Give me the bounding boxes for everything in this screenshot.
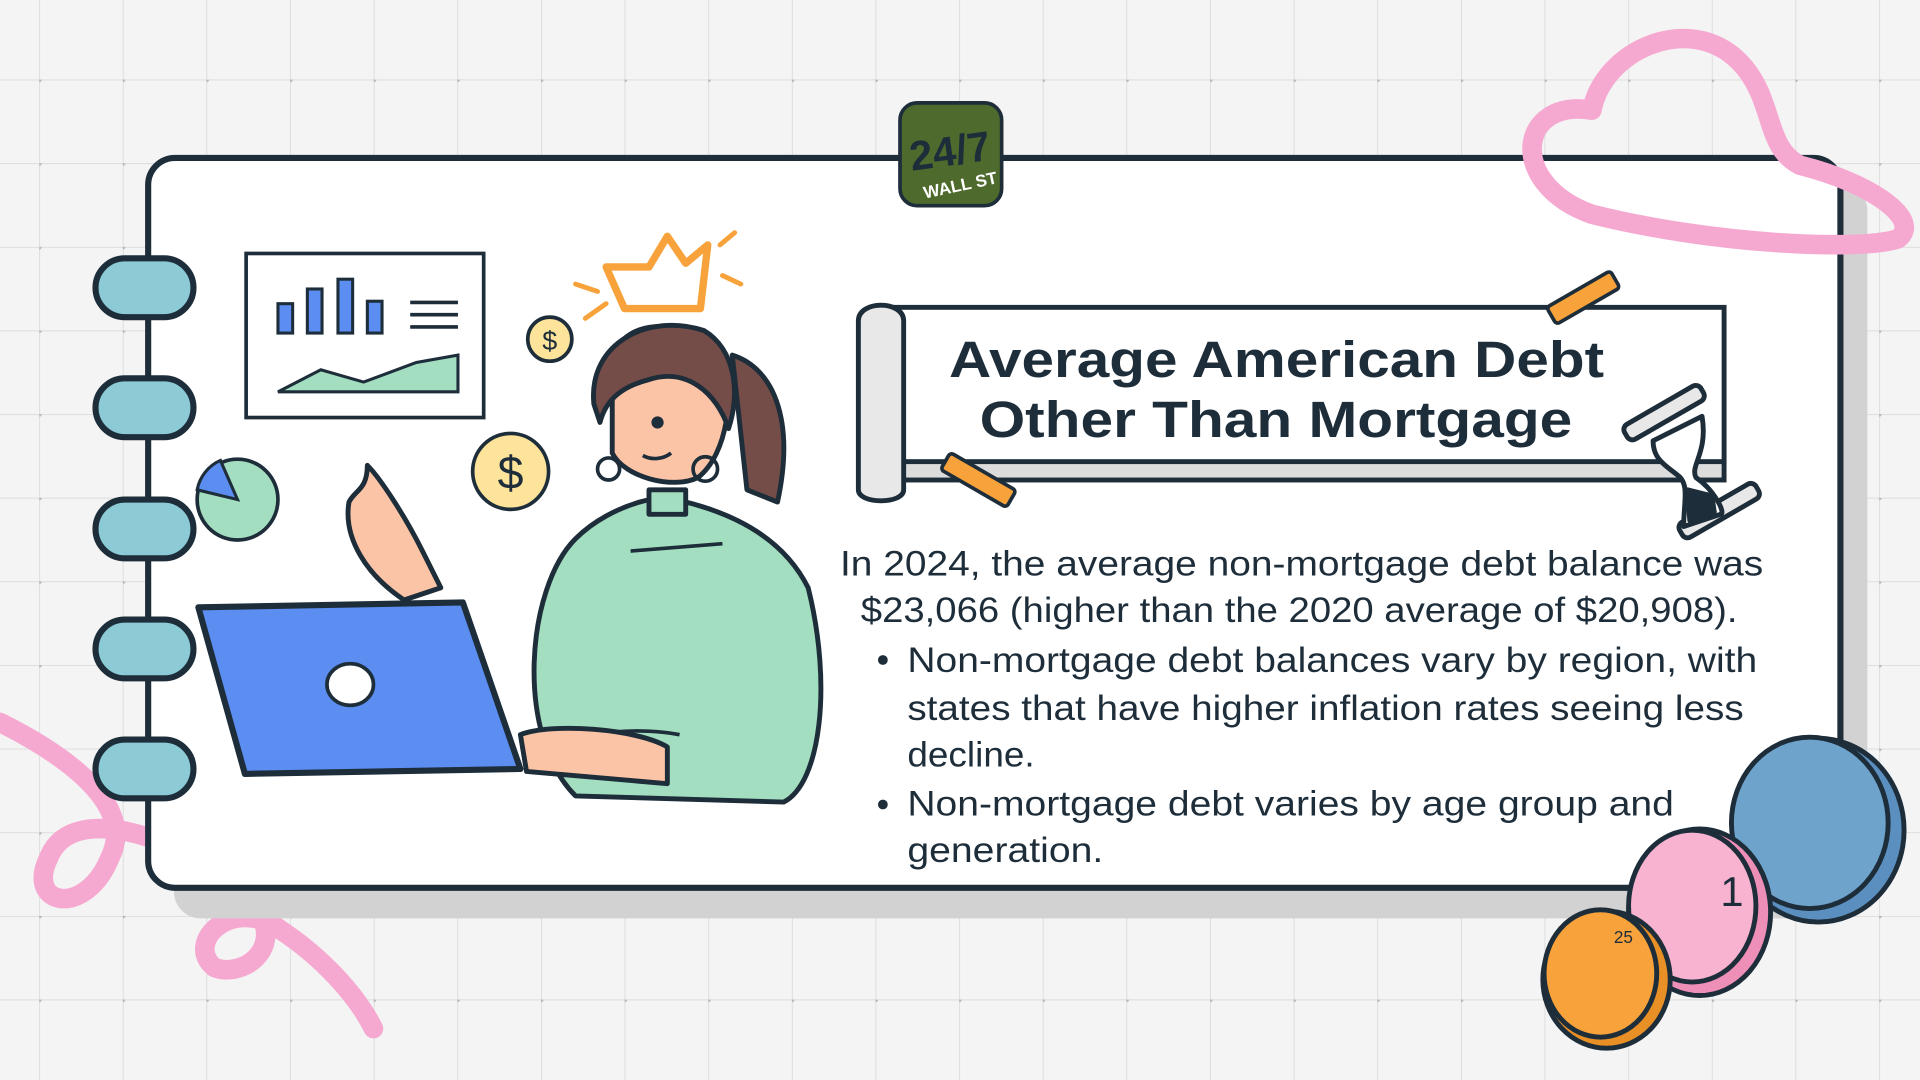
bullet 1: decline. [907, 735, 1035, 775]
bullet 2: generation. [907, 830, 1103, 870]
title banner [858, 271, 1724, 507]
body text: $23,066 (higher than the 2020 average of $20,908). [861, 590, 1738, 630]
crown [576, 233, 741, 318]
ring binders [96, 258, 193, 798]
bullet 1: states that have higher inflation rates seeing less [907, 688, 1744, 728]
bullet 2: Non-mortgage debt varies by age group and [907, 784, 1674, 824]
coins: 25 [1614, 927, 1633, 947]
coins dollar: $ [542, 326, 557, 356]
body text [840, 544, 1763, 870]
body text: In 2024, the average non-mortgage debt balance was [840, 544, 1763, 584]
pink heart top right [1532, 39, 1904, 245]
logo: WALL ST [922, 167, 999, 203]
bullet 2 [878, 784, 1674, 870]
pie icon [197, 459, 278, 540]
logo: 24/7 [907, 122, 993, 180]
logo [900, 103, 1002, 206]
woman [348, 325, 821, 802]
laptop [198, 602, 520, 774]
coins dollar [473, 317, 572, 509]
coins [1543, 737, 1904, 1048]
chart panel [246, 253, 484, 418]
title: Average American Debt [949, 330, 1604, 388]
card [148, 158, 1840, 888]
pink ribbon left [0, 722, 373, 1029]
card shadow [174, 184, 1867, 918]
title: Other Than Mortgage [980, 390, 1572, 448]
bullet 1: Non-mortgage debt balances vary by region, with [907, 640, 1757, 680]
bullet 1 [878, 640, 1757, 775]
coins dollar: $ [498, 447, 524, 499]
coins: 1 [1720, 868, 1744, 915]
title [949, 330, 1604, 448]
hourglass [1622, 383, 1762, 540]
